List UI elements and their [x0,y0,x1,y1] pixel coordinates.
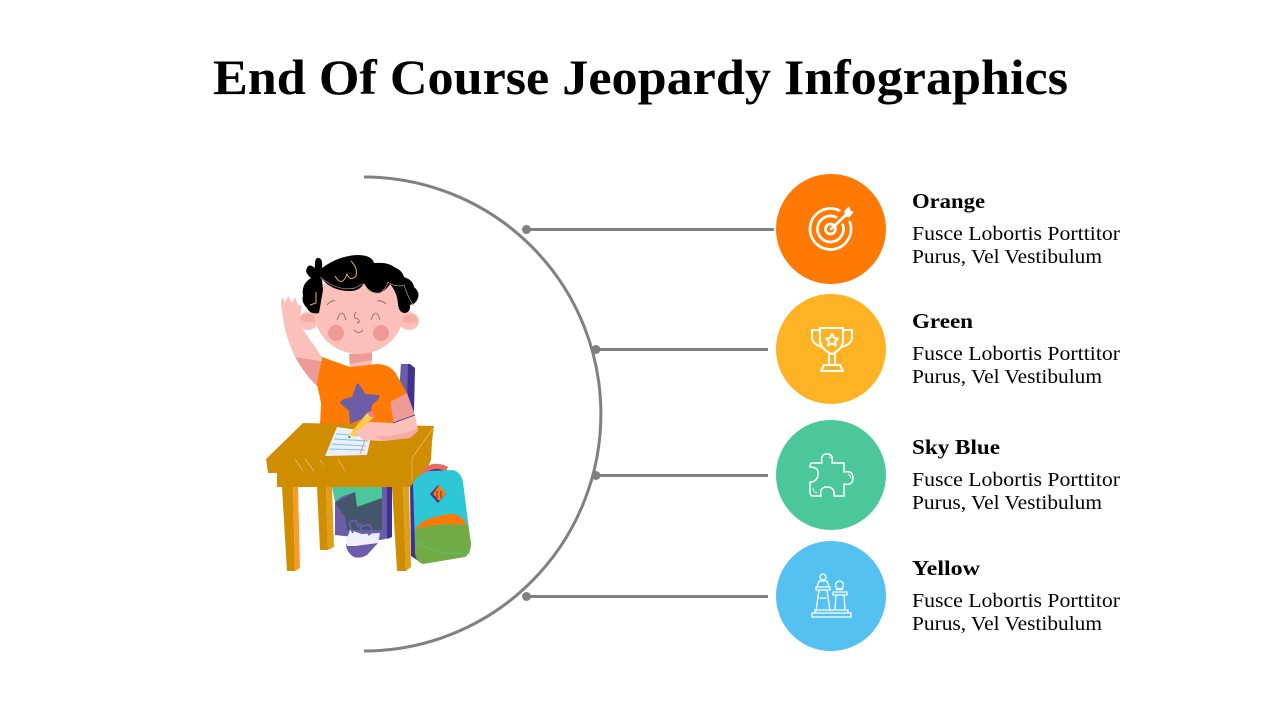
icon: trophy [812,328,852,371]
sky blue description: Fusce Lobortis Porttitor [912,469,1120,491]
ears [298,312,419,330]
green description: Purus, Vel Vestibulum [912,366,1102,388]
green description: Fusce Lobortis Porttitor [912,343,1120,365]
facial features [327,301,386,332]
shirt star [340,383,379,424]
orange description: Purus, Vel Vestibulum [912,246,1102,268]
neck [349,352,372,368]
chair back [398,364,415,412]
orange circle [776,174,886,284]
item: orange [776,174,1120,284]
orange heading: Orange [912,189,985,213]
item: green [776,294,1120,404]
green circle [776,420,886,530]
sleeve [390,393,415,423]
sky blue description: Purus, Vel Vestibulum [912,492,1102,514]
shirt [317,357,407,426]
green description [912,343,1120,388]
yellow description [912,590,1120,635]
amber circle [776,294,886,404]
cheeks [328,325,389,341]
raised arm [281,296,322,388]
chair seat [335,487,392,540]
connectors [522,225,774,601]
yellow description: Purus, Vel Vestibulum [912,613,1102,635]
sky blue description [912,469,1120,514]
trousers [332,487,382,530]
item: sky blue [776,420,1120,530]
title: End Of Course Jeopardy Infographics [213,49,1068,105]
yellow description: Fusce Lobortis Porttitor [912,590,1120,612]
semicircle arc [364,177,601,651]
icon: puzzle piece [810,454,853,496]
shoes [346,521,380,558]
orange description: Fusce Lobortis Porttitor [912,223,1120,245]
backpack [410,466,471,564]
blue circle [776,541,886,651]
icon: target [810,207,853,249]
yellow heading: Yellow [912,556,981,580]
illustration: student at desk [266,255,471,571]
hair [302,255,418,313]
desk top [266,423,434,487]
icon: chess pieces [812,574,851,617]
face [314,268,404,354]
item: yellow [776,541,1120,651]
green heading: Green [912,309,973,333]
paper [325,427,372,456]
desk legs [282,487,411,571]
forearm and pencil [348,411,418,441]
sky blue heading: Sky Blue [912,435,1000,459]
orange description [912,223,1120,268]
